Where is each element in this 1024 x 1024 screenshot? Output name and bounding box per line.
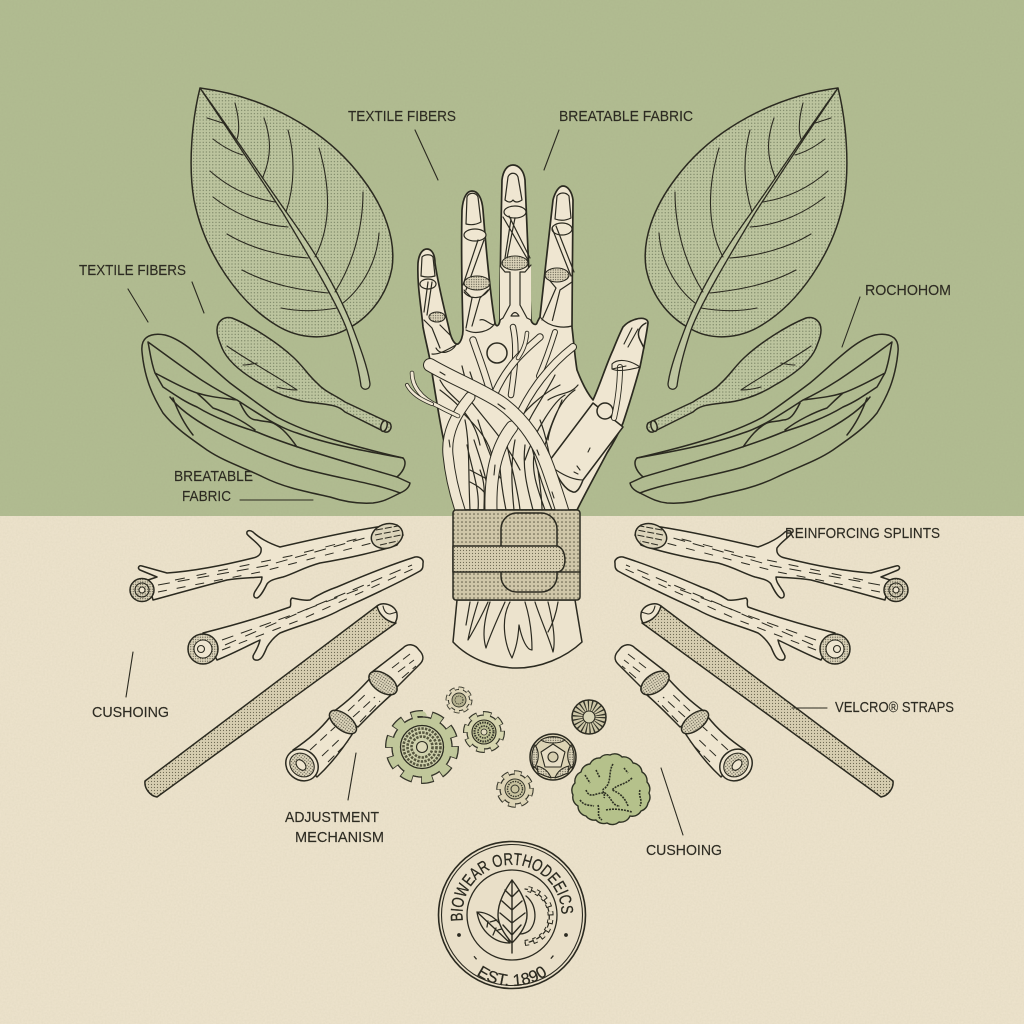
emblem: Biowear Orthodeeics seal <box>438 840 586 990</box>
label: cushoing right: CUSHOING <box>646 842 722 859</box>
label: breatable fabric top: BREATABLE FABRIC <box>559 108 693 125</box>
icon: anatomical hand <box>407 165 648 510</box>
label: rochohom <box>842 282 951 347</box>
stick: left second branch <box>188 557 423 664</box>
icon: small left leaf <box>217 318 391 432</box>
label: textile fibers left <box>79 262 204 322</box>
emblem rings <box>438 842 586 988</box>
label: cushoing left: CUSHOING <box>92 704 169 721</box>
label: textile fibers top: TEXTILE FIBERS <box>348 108 456 125</box>
lower hand below strap <box>453 600 582 668</box>
background: upper green band <box>0 0 1024 516</box>
label: breatable fabric lower: FABRIC <box>182 488 231 505</box>
stick: left bamboo <box>279 645 423 787</box>
label: breatable fabric lower <box>174 468 313 505</box>
strap body <box>453 510 580 600</box>
emblem separator dots <box>457 933 568 960</box>
label: cushoing right <box>646 768 722 859</box>
emblem small leaf <box>477 912 510 943</box>
thumb bones <box>549 323 646 492</box>
knuckle joints <box>429 256 569 322</box>
stick: right second branch <box>615 557 850 664</box>
label: rochohom: ROCHOHOM <box>865 282 951 299</box>
rod: right splint <box>641 604 893 797</box>
label: reinforcing splints: REINFORCING SPLINTS <box>785 525 940 542</box>
label: breatable fabric lower: BREATABLE <box>174 468 253 485</box>
label: velcro straps: VELCRO® STRAPS <box>835 699 954 716</box>
icon: right leaf bundle <box>630 334 898 503</box>
stick: left upper branch <box>130 520 406 602</box>
stick: right bamboo <box>615 645 759 787</box>
palm circle <box>487 343 507 363</box>
icon: left leaf bundle <box>142 334 410 503</box>
icon: medium gear <box>466 714 502 750</box>
strap band <box>453 546 565 572</box>
icon: large left leaf <box>191 88 393 389</box>
emblem established date: EST. 1890 <box>477 966 546 986</box>
buckle <box>501 513 557 592</box>
label: textile fibers top <box>348 108 456 180</box>
icon: small right leaf <box>647 318 821 432</box>
label: adjustment mechanism: ADJUSTMENT <box>285 809 379 826</box>
icon: large gear <box>390 716 454 778</box>
label: adjustment mechanism <box>285 753 384 846</box>
hand outline <box>418 165 648 510</box>
wrist strap with buckle <box>453 510 582 668</box>
icon: rayed disc <box>572 700 606 734</box>
icon: large right leaf <box>645 88 847 389</box>
finger bones <box>420 173 574 354</box>
icon: lower small gear <box>500 774 530 804</box>
label: adjustment mechanism: MECHANISM <box>295 829 384 846</box>
label: breatable fabric top <box>544 108 693 170</box>
icon: moss clump <box>572 754 650 825</box>
label: cushoing left <box>92 652 169 721</box>
rod: left splint <box>145 604 397 797</box>
icon: seed-pod disc <box>530 734 576 780</box>
emblem name on arc: BIOWEAR ORTHODEEICS <box>450 852 574 921</box>
emblem gear <box>520 889 551 943</box>
stick: right upper branch <box>632 520 908 602</box>
nerve and tendon bundle <box>407 327 578 510</box>
label: textile fibers left: TEXTILE FIBERS <box>79 262 186 279</box>
emblem large leaf <box>498 880 527 953</box>
icon: tiny gear <box>448 689 470 711</box>
